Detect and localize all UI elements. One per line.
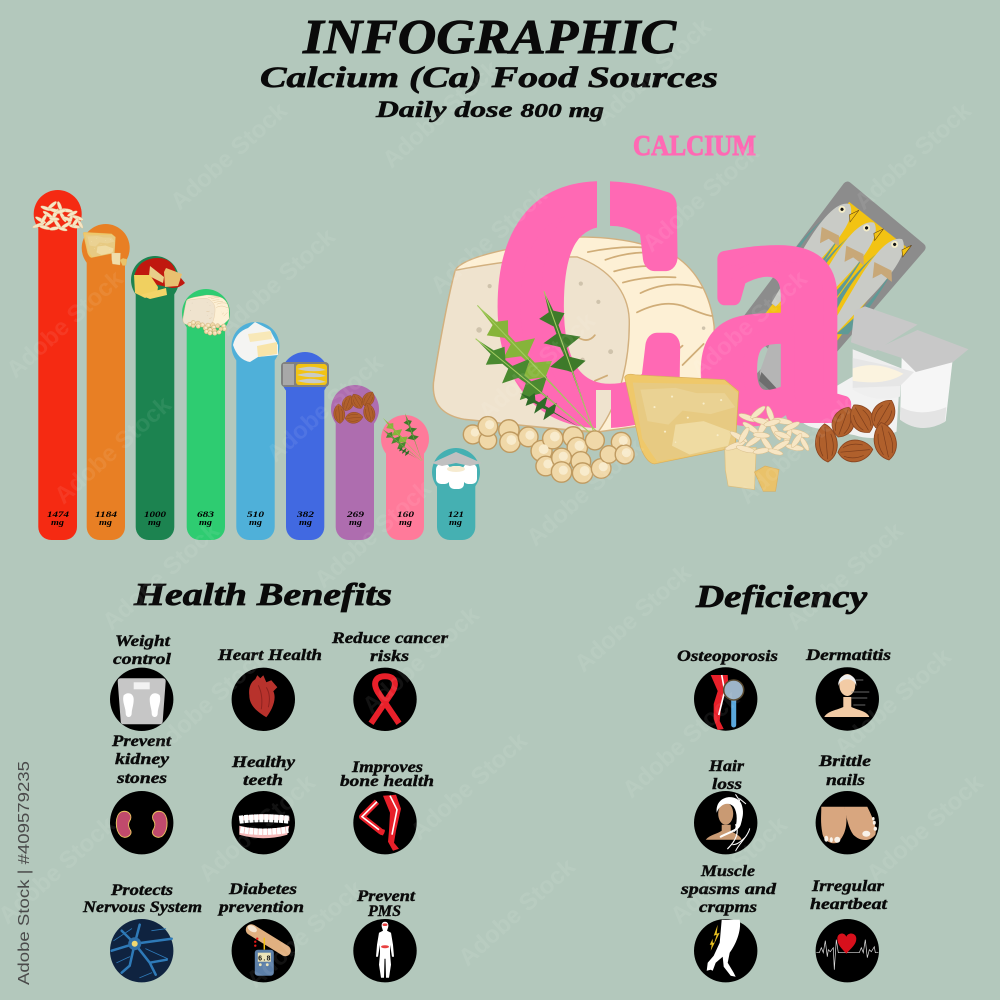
heading: calcium: CALCIUM xyxy=(633,130,756,162)
watermark: Adobe Stock xyxy=(569,559,697,678)
bar: 1184 mg xyxy=(82,224,130,540)
value labels: 160 xyxy=(397,509,415,519)
benefit: prevent PMS xyxy=(353,888,417,982)
subtitle: Calcium (Ca) Food Sources xyxy=(260,61,718,94)
benefit: protects nervous system xyxy=(82,882,202,982)
icon: soybeans xyxy=(188,320,227,336)
deficiency: brittle nails: Brittle xyxy=(818,753,871,770)
panel: calcium food illustration xyxy=(432,181,968,492)
benefit: heart health: Heart Health xyxy=(217,647,322,664)
panel: deficiency xyxy=(677,647,891,982)
icon: tofu xyxy=(183,295,229,327)
value labels xyxy=(47,509,464,527)
icon: edam cheese xyxy=(134,258,185,299)
benefit: diabetes prevention: Diabetes xyxy=(228,881,297,898)
watermark: Adobe Stock xyxy=(665,811,793,930)
bar: 1000 mg xyxy=(131,256,179,540)
benefit: prevent PMS: Prevent xyxy=(356,888,416,905)
benefit: prevent kidney stones: Prevent xyxy=(111,733,172,750)
watermark: Adobe Stock xyxy=(213,223,341,342)
watermark: Adobe Stock xyxy=(781,517,909,636)
heading: health benefits: Health Benefits xyxy=(133,576,392,612)
value labels: mg xyxy=(148,517,162,527)
watermark: Adobe Stock xyxy=(309,475,437,594)
value labels: mg xyxy=(449,517,463,527)
value labels: 510 xyxy=(247,509,265,519)
bar: 382 mg xyxy=(281,352,329,540)
benefit: prevent kidney stones xyxy=(110,733,173,854)
benefit: weight control xyxy=(110,633,173,731)
icon: rice xyxy=(32,200,84,232)
watermark: Adobe Stock xyxy=(49,391,177,510)
benefit: reduce cancer risks: risks xyxy=(370,648,409,665)
deficiency: irregular heartbeat xyxy=(810,878,888,982)
value labels: mg xyxy=(199,517,213,527)
benefit: weight control: control xyxy=(113,651,172,668)
watermark: Adobe Stock xyxy=(425,181,553,300)
watermark: Adobe Stock xyxy=(377,55,505,174)
benefit: reduce cancer risks: Reduce cancer xyxy=(331,630,449,647)
big letters Ca: C xyxy=(496,121,689,482)
benefit: improves bone health xyxy=(340,759,434,854)
benefit: prevent PMS: PMS xyxy=(367,903,401,920)
watermark: Adobe Stock xyxy=(829,643,957,762)
bar: 1474 mg xyxy=(34,190,82,540)
deficiency: osteoporosis: Osteoporosis xyxy=(677,648,778,665)
value labels: mg xyxy=(299,517,313,527)
value labels: mg xyxy=(399,517,413,527)
watermark: Adobe Stock xyxy=(357,601,485,720)
illustration: tofu and sardines behind letters xyxy=(433,186,968,438)
benefit: heart health xyxy=(217,647,322,731)
benefit: diabetes prevention xyxy=(217,881,304,982)
value labels: 1000 xyxy=(144,509,167,519)
deficiency: muscle spasms and cramps xyxy=(680,863,777,982)
title xyxy=(260,9,718,122)
watermark: Adobe Stock xyxy=(241,875,369,994)
icon: sardine tin xyxy=(281,362,329,387)
big letters Ca: a xyxy=(698,108,849,491)
watermark: Adobe Stock xyxy=(637,139,765,258)
watermark: Adobe Stock xyxy=(617,685,745,804)
benefit: healthy teeth: Healthy xyxy=(231,754,296,771)
deficiency: muscle spasms and cramps: Muscle xyxy=(700,863,755,880)
benefit: prevent kidney stones: stones xyxy=(116,770,167,787)
watermark: Adobe Stock xyxy=(589,13,717,132)
bar chart: calcium food sources xyxy=(32,190,482,540)
heading: deficiency: Deficiency xyxy=(695,578,868,614)
deficiency: osteoporosis xyxy=(677,648,778,731)
watermark: Adobe Stock xyxy=(849,97,977,216)
sardine tin xyxy=(746,186,921,402)
value labels: 1184 xyxy=(95,509,117,519)
value labels: 683 xyxy=(197,509,215,519)
watermark: Adobe Stock xyxy=(261,349,389,468)
benefit: protects nervous system: Protects xyxy=(110,882,173,899)
benefit: weight control: Weight xyxy=(115,633,171,650)
value labels: 1474 xyxy=(47,509,69,519)
watermark: Adobe Stock xyxy=(733,391,861,510)
deficiency: brittle nails xyxy=(816,753,879,854)
watermark: Adobe Stock xyxy=(453,853,581,972)
icon: almonds xyxy=(333,389,377,424)
icon: yogurt xyxy=(432,452,482,489)
illustration: foods in front of letters xyxy=(463,285,901,491)
benefit: protects nervous system: Nervous System xyxy=(82,899,202,916)
title: INFOGRAPHIC xyxy=(302,9,677,64)
daily dose: Daily dose 800 mg xyxy=(375,97,604,122)
deficiency: hair loss: Hair xyxy=(708,758,745,775)
benefit: improves bone health: Improves xyxy=(351,759,423,776)
watermark: Adobe Stock xyxy=(145,643,273,762)
benefit: healthy teeth xyxy=(231,754,296,854)
value labels: mg xyxy=(99,517,113,527)
deficiency: brittle nails: nails xyxy=(826,772,865,789)
bar: 683 mg xyxy=(182,289,230,540)
value labels: mg xyxy=(249,517,263,527)
benefit: diabetes prevention: prevention xyxy=(217,899,304,916)
watermark: Adobe Stock xyxy=(685,265,813,384)
deficiency: dermatitis xyxy=(805,647,891,731)
bar: 121 mg xyxy=(432,448,480,540)
watermark: Adobe Stock xyxy=(193,769,321,888)
watermark: Adobe Stock xyxy=(521,433,649,552)
benefit: prevent kidney stones: kidney xyxy=(115,751,170,768)
watermark: Adobe Stock xyxy=(861,769,989,888)
value labels: 269 xyxy=(346,509,365,519)
benefit: diabetes prevention: 6.8 xyxy=(258,956,271,964)
deficiency: muscle spasms and cramps: spasms and xyxy=(680,881,777,898)
icon: arugula xyxy=(379,411,428,466)
big letters Ca xyxy=(498,181,852,428)
deficiency: muscle spasms and cramps: crapms xyxy=(699,899,757,916)
value labels: mg xyxy=(51,517,65,527)
icon: parmesan xyxy=(83,232,127,266)
deficiency: dermatitis: Dermatitis xyxy=(805,647,891,664)
bar: 269 mg xyxy=(331,385,379,540)
watermark: Adobe Stock xyxy=(1,265,129,384)
deficiency: irregular heartbeat: Irregular xyxy=(811,878,885,895)
bar: 510 mg xyxy=(232,322,280,540)
deficiency: hair loss: loss xyxy=(712,776,742,793)
watermark: Adobe Stock xyxy=(473,307,601,426)
value labels: mg xyxy=(349,517,363,527)
watermark: Adobe Stock xyxy=(165,97,293,216)
value labels: 382 xyxy=(296,509,315,519)
deficiency: hair loss xyxy=(694,758,757,854)
benefit: reduce cancer risks xyxy=(331,630,449,731)
watermark: Adobe Stock xyxy=(405,727,533,846)
watermark: Adobe Stock xyxy=(97,517,225,636)
icon: camembert xyxy=(233,322,278,362)
deficiency: irregular heartbeat: heartbeat xyxy=(810,896,888,913)
benefit: healthy teeth: teeth xyxy=(243,772,283,789)
value labels: 121 xyxy=(448,509,464,519)
bar: 160 mg xyxy=(381,415,429,540)
panel: health benefits xyxy=(82,630,449,982)
stock id: Adobe Stock | #409579235 xyxy=(16,761,33,985)
benefit: improves bone health: bone health xyxy=(340,773,434,790)
